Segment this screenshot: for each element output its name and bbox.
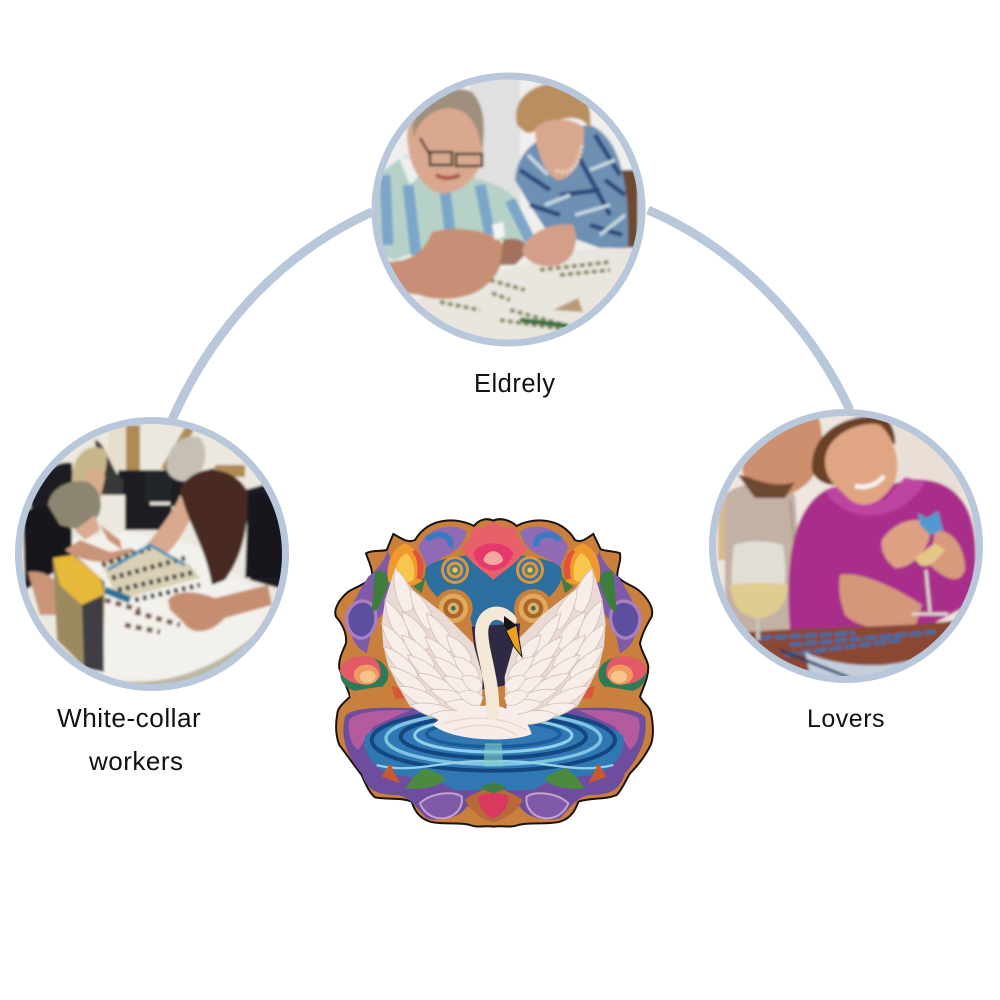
green leaves [372, 567, 617, 611]
side swirls [347, 601, 640, 638]
man face and hair [407, 102, 483, 193]
large wine glass [730, 540, 787, 586]
left purple drape [349, 550, 407, 653]
connecting arc: left [172, 212, 372, 420]
photo circle: white-collar workers [15, 420, 290, 690]
flowers [340, 522, 647, 693]
horizontal orange band [350, 687, 637, 707]
right arm [168, 585, 272, 631]
white table [58, 532, 272, 680]
right purple drape [580, 550, 637, 653]
connecting arc: right [648, 210, 850, 410]
pink shading [349, 710, 640, 750]
gray-haired standing head [167, 437, 205, 481]
woman hair and face [516, 83, 591, 133]
label: Eldrely: Eldrely [474, 370, 555, 398]
top lobe swirls [427, 535, 560, 547]
man forearm and hand [839, 574, 922, 630]
table [748, 619, 954, 671]
left wing [376, 566, 484, 726]
central blue panel [425, 554, 562, 683]
arms [65, 540, 140, 562]
label: White-collar workers: workers [88, 746, 184, 776]
back wall dark right [244, 484, 280, 590]
man arm and hand [375, 229, 503, 299]
photo circle: elderly couple [370, 70, 650, 350]
puzzle frame [335, 519, 653, 827]
woman hair and face [812, 416, 895, 485]
blue puzzle piece [918, 511, 943, 535]
gold swirls [434, 556, 553, 628]
label: White-collar workers [57, 703, 201, 776]
bottom ornaments [382, 763, 607, 823]
man hoodie [724, 484, 799, 634]
small blooms [392, 686, 595, 698]
gray-haired seated person [23, 505, 72, 590]
woman blouse [515, 125, 628, 248]
label: White-collar workers: White-collar [57, 703, 201, 733]
chairs [118, 470, 172, 530]
right wing [503, 566, 611, 726]
woman hands [882, 520, 930, 568]
swan puzzle illustration [335, 519, 653, 827]
table [416, 245, 634, 340]
woman hands [522, 224, 576, 266]
man shirt [377, 155, 533, 260]
top lobes purple right [520, 527, 568, 567]
top lobes purple [418, 527, 467, 567]
lower purple field [343, 708, 646, 820]
black tops [30, 462, 75, 515]
jigsaw scatter [492, 222, 505, 240]
water [365, 709, 624, 790]
infographic [15, 72, 983, 828]
photo circle: lovers [710, 412, 982, 690]
long brown hair [180, 470, 248, 585]
blonde head [70, 445, 109, 484]
small wine glass [915, 543, 945, 566]
dark panel behind neck [472, 623, 520, 690]
puzzle [102, 545, 200, 600]
puzzle box [53, 555, 105, 670]
woman hoodie [788, 479, 976, 632]
man face [742, 415, 822, 498]
label: Lovers: Lovers [807, 705, 885, 733]
swan body and neck [433, 613, 532, 739]
